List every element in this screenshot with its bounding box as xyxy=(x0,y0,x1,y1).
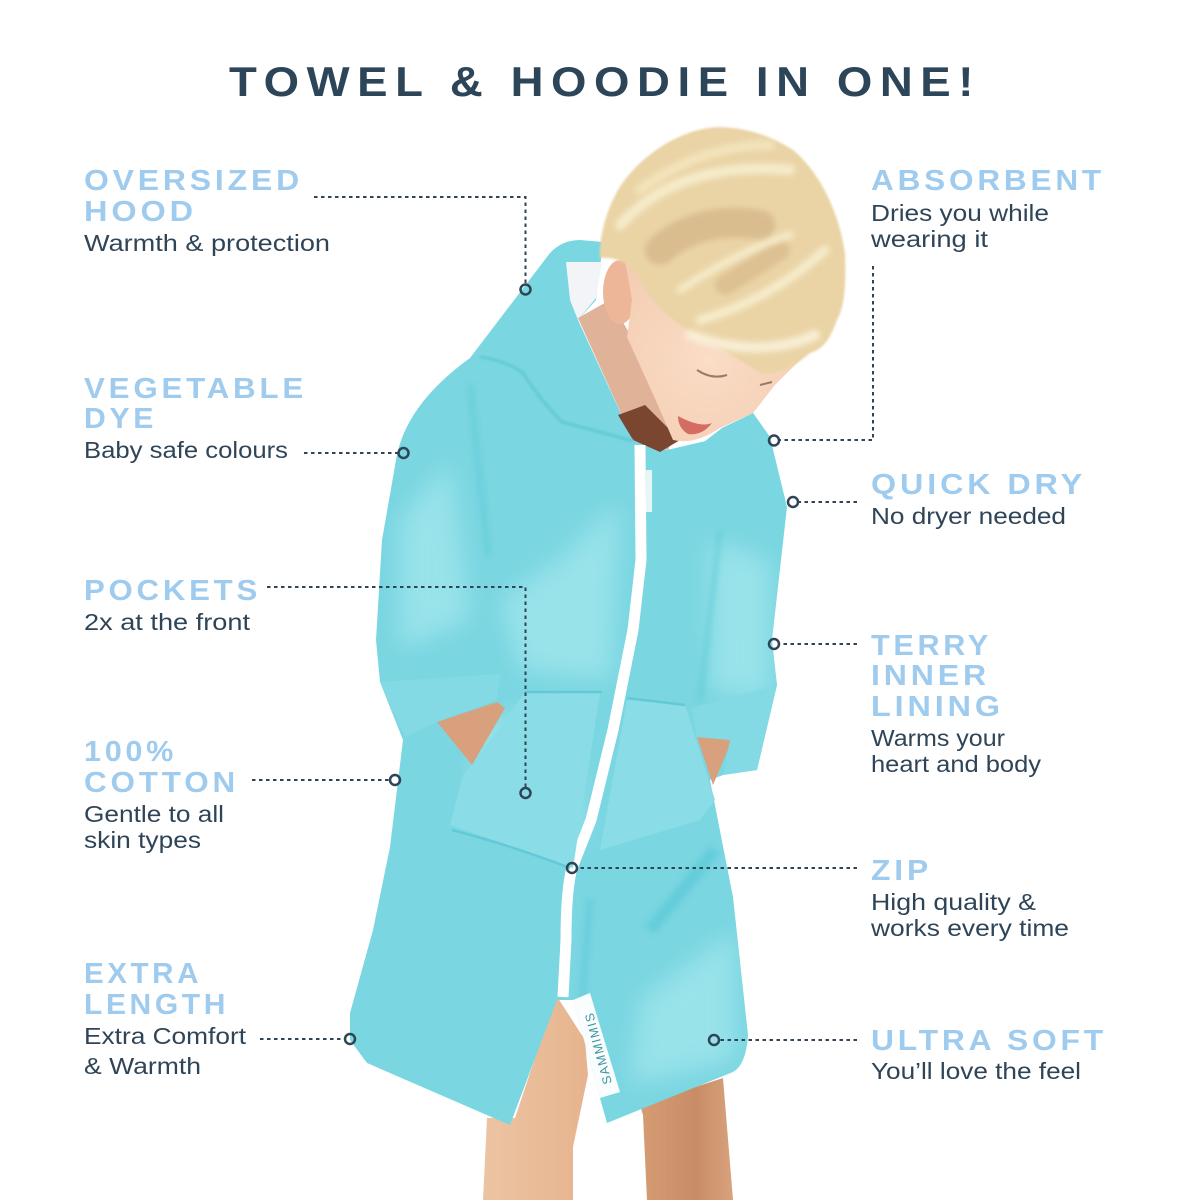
label: terry inner lining: LINING xyxy=(871,691,1004,723)
neck xyxy=(578,300,680,452)
callout line: oversized hood xyxy=(314,197,530,294)
zip pull xyxy=(646,470,652,512)
label: ultra soft xyxy=(871,1025,1107,1084)
label: vegetable dye: VEGETABLE xyxy=(84,373,307,405)
label: extra length xyxy=(84,958,247,1079)
robe light shading xyxy=(400,460,770,1085)
label: 100% cotton xyxy=(84,736,239,853)
label: absorbent: Dries you while xyxy=(871,200,1049,226)
callout line: vegetable dye xyxy=(304,448,408,458)
mouth xyxy=(678,416,712,434)
label: absorbent: wearing it xyxy=(870,226,989,252)
hands xyxy=(437,702,732,785)
label: ultra soft: You’ll love the feel xyxy=(871,1058,1081,1084)
callout line: cotton xyxy=(252,775,400,785)
label: oversized hood: HOOD xyxy=(84,196,197,228)
label: pockets xyxy=(84,575,261,635)
label: oversized hood: Warmth & protection xyxy=(84,230,330,256)
callout line: zip xyxy=(567,863,857,873)
label: zip: works every time xyxy=(870,915,1069,941)
eye xyxy=(697,370,772,385)
label: quick dry: QUICK DRY xyxy=(871,469,1086,501)
hood lining xyxy=(566,262,602,320)
label: terry inner lining: Warms your xyxy=(871,725,1005,751)
label: 100% cotton: COTTON xyxy=(84,767,239,799)
label: terry inner lining xyxy=(871,630,1042,777)
label: 100% cotton: 100% xyxy=(84,736,177,768)
robe body xyxy=(350,240,787,1125)
label: vegetable dye xyxy=(84,373,307,463)
label: extra length: & Warmth xyxy=(84,1053,201,1079)
label: 100% cotton: Gentle to all xyxy=(84,801,224,827)
robe label tag xyxy=(573,993,620,1098)
label: terry inner lining: heart and body xyxy=(871,751,1042,777)
callout line: pockets xyxy=(267,587,530,798)
label: pockets: 2x at the front xyxy=(84,609,251,635)
hair highlights and shadow xyxy=(620,145,825,348)
label: zip: ZIP xyxy=(871,855,932,887)
robe dark folds xyxy=(470,385,720,1000)
hair xyxy=(600,127,845,373)
callout line: extra length xyxy=(260,1034,355,1044)
label: oversized hood: OVERSIZED xyxy=(84,165,303,197)
label: vegetable dye: DYE xyxy=(84,403,157,435)
label: zip xyxy=(870,855,1069,941)
title: TOWEL & HOODIE IN ONE! xyxy=(229,58,981,105)
label: vegetable dye: Baby safe colours xyxy=(84,437,288,463)
callout line: ultra soft xyxy=(709,1035,857,1045)
label: terry inner lining: TERRY xyxy=(871,630,992,662)
zip xyxy=(563,445,641,997)
label: extra length: LENGTH xyxy=(84,989,229,1021)
label: ultra soft: ULTRA SOFT xyxy=(871,1025,1107,1057)
left sleeve cuff xyxy=(380,674,500,737)
ear xyxy=(603,260,637,324)
pocket seam xyxy=(452,692,685,868)
label: quick dry xyxy=(871,469,1086,529)
robe label tag: SAMMIMIS xyxy=(582,1010,615,1086)
label: absorbent xyxy=(870,165,1105,252)
pocket flaps xyxy=(450,692,715,868)
callout line: absorbent xyxy=(769,266,873,446)
label: extra length: Extra Comfort xyxy=(84,1023,247,1049)
label: extra length: EXTRA xyxy=(84,958,202,990)
right sleeve cuff xyxy=(692,685,777,775)
callout line: quick dry xyxy=(788,497,857,507)
label: zip: High quality & xyxy=(871,889,1036,915)
hood seam xyxy=(480,357,633,441)
label: quick dry: No dryer needed xyxy=(871,503,1066,529)
label: oversized hood xyxy=(84,165,330,256)
label: 100% cotton: skin types xyxy=(84,827,201,853)
robe collar right xyxy=(667,413,770,468)
callout line: terry lining xyxy=(769,639,857,649)
label: pockets: POCKETS xyxy=(84,575,261,607)
legs xyxy=(483,995,733,1200)
face xyxy=(625,260,810,441)
label: terry inner lining: INNER xyxy=(871,660,990,692)
label: absorbent: ABSORBENT xyxy=(871,165,1105,197)
illustration: child wearing hooded towel robe xyxy=(350,127,845,1200)
